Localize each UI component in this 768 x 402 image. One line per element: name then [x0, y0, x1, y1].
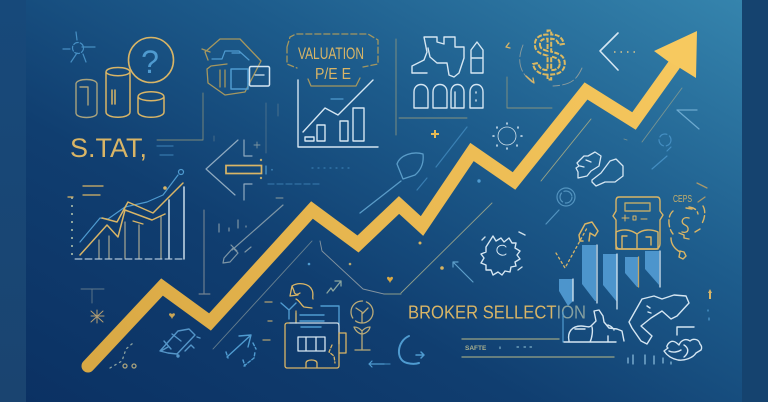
- icon: gear face: [481, 232, 525, 275]
- icon: calculator book: [613, 197, 663, 249]
- marks near CEPS: [697, 183, 707, 202]
- icon: coin cylinders: [76, 68, 164, 118]
- icon: dollar coin right: [669, 206, 705, 259]
- guide line: lower centre: [213, 241, 312, 349]
- icon: dollar sign: $: [532, 21, 566, 88]
- icon: shovel: [360, 153, 423, 213]
- icon: coin pile: [664, 327, 702, 360]
- icon: boot shape: [564, 310, 624, 342]
- icon: elephant: [629, 295, 689, 344]
- icon: puzzle glyphs: [412, 37, 483, 108]
- accent diagonals: [417, 127, 467, 190]
- icon: dollar sign: [506, 21, 582, 88]
- icon: ladder chair: [160, 329, 200, 357]
- dots: [312, 167, 349, 169]
- line accents: [214, 103, 278, 153]
- icon: left arrow chevron with bar: [206, 140, 272, 200]
- guide arrow line: [320, 241, 384, 294]
- panel: valuation label: P/E E: [315, 66, 351, 83]
- icon: magnifier sphere: [546, 188, 575, 224]
- circuit line: [157, 93, 203, 140]
- chart: line and bars: [68, 170, 185, 259]
- long gold-blue guide line: [384, 203, 492, 294]
- panel: valuation label: [287, 34, 378, 86]
- icon: house module: [202, 39, 270, 95]
- icon: heart small: [387, 277, 393, 283]
- diagonal line: [541, 119, 591, 181]
- dots: [418, 242, 444, 270]
- dashed guide: [268, 183, 319, 185]
- lower rules and label: SAFTE: [465, 345, 487, 352]
- dash: [276, 197, 283, 199]
- icon: plus: [431, 130, 439, 138]
- small dot: [477, 179, 481, 183]
- icon: heart: [169, 313, 175, 319]
- icon: white chevron with dots: [600, 33, 639, 70]
- lines beside STAT: [157, 146, 173, 155]
- icon: arrows white: [576, 152, 623, 186]
- icon: small blue arrow: [369, 361, 384, 367]
- bar chart: blue wedges: [559, 245, 660, 342]
- icon: dash marks: [263, 302, 272, 340]
- heading: BROKER SELLECTION: BROKER SELLECTION: [408, 302, 586, 322]
- icon: circular arrows: [226, 335, 256, 366]
- icon: dotted sun: [493, 123, 522, 149]
- frame lines: [396, 39, 552, 135]
- icon: machine box: [281, 284, 346, 368]
- chart: valuation bars: [298, 80, 378, 147]
- tick marks: [628, 355, 671, 364]
- icon: bulb cluster: [652, 134, 671, 169]
- icon: small arrows: [308, 263, 351, 293]
- icon: plant in circle: [351, 301, 373, 350]
- text: CEPS: CEPS: [673, 193, 692, 205]
- icon: arrow thin: [453, 262, 473, 282]
- dotted curve with coins: [110, 343, 136, 368]
- heading: STAT: S.TAT,: [70, 133, 147, 163]
- icon: pencil diagonal: [219, 205, 283, 263]
- icon: question mark circle: [128, 38, 174, 82]
- lower rules and label: [462, 339, 614, 357]
- icon: T mark: [81, 289, 104, 303]
- vertical post: [199, 210, 210, 294]
- arrow up small right: [708, 289, 712, 320]
- icon: light blue corner: [677, 110, 699, 129]
- icon: arrow tail sketch right: [624, 88, 682, 142]
- icon: question mark circle: ?: [141, 44, 159, 80]
- panel: valuation label: VALUATION: [298, 44, 364, 63]
- icon: asterisk: [91, 310, 104, 323]
- icon: sun sketch: [63, 32, 95, 62]
- main growth arrow: [88, 31, 697, 366]
- icon: blue return arrow: [384, 336, 424, 364]
- icon: dotted curve up: [556, 222, 598, 268]
